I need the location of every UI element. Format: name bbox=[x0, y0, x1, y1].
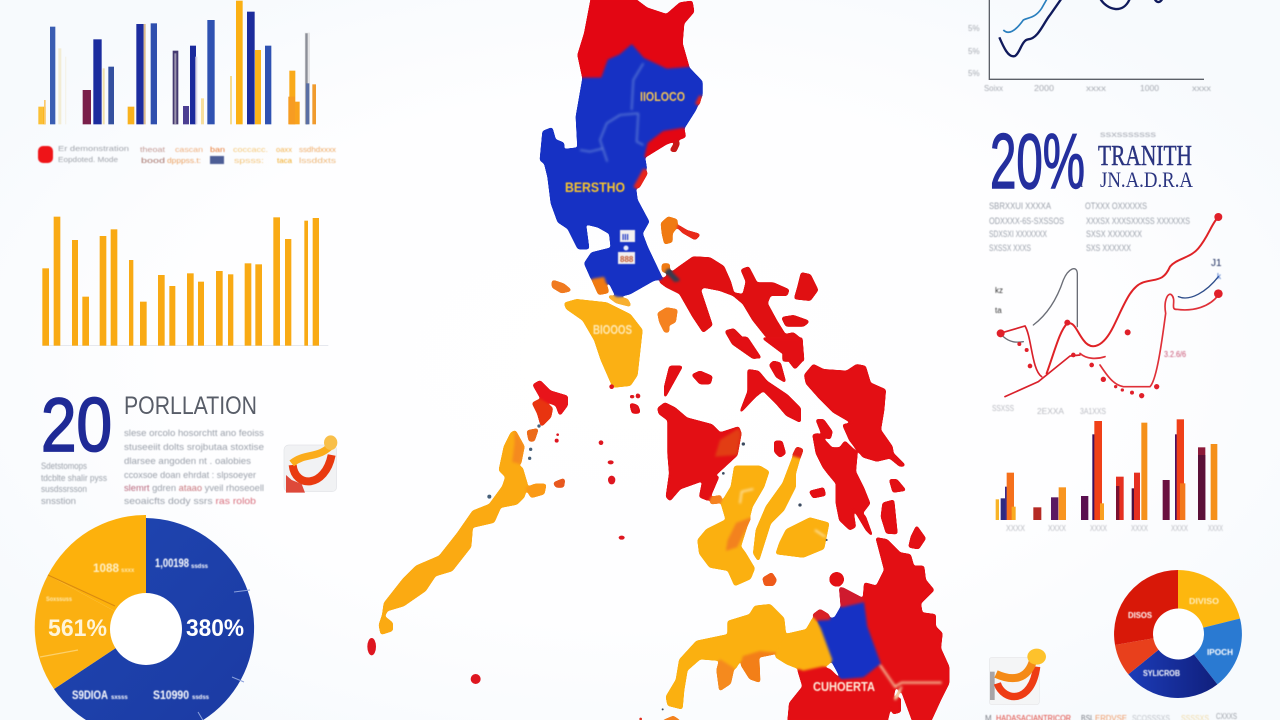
text block: population description: ccoxsoe doan ehrdat : slpsoeyer bbox=[124, 470, 256, 481]
chart axis labels: 1000 bbox=[1140, 84, 1160, 93]
slice: navy bbox=[1128, 634, 1217, 698]
chart labels: kz bbox=[995, 286, 1003, 295]
slice labels: IPOCH bbox=[1207, 648, 1233, 657]
donut labels: 1,00198 bbox=[155, 556, 189, 570]
region: Cebu bbox=[754, 448, 802, 560]
bar chart: yellow bars bbox=[42, 217, 328, 346]
legend labels: ban bbox=[210, 145, 225, 154]
slice labels: DISOS bbox=[1128, 611, 1153, 620]
chart axis labels: xxxx bbox=[1192, 84, 1211, 93]
region: Bicol red bbox=[660, 257, 803, 361]
text block: population description: slese orcolo hosorchtt ano feoiss bbox=[124, 428, 264, 439]
map label: north: IIOLOCO bbox=[640, 89, 685, 104]
text block: right column description: SXSSX XXXS bbox=[989, 243, 1031, 254]
donut labels: S9DIOA bbox=[72, 688, 108, 702]
chart axis labels: 5% bbox=[968, 24, 980, 33]
donut labels bbox=[46, 556, 244, 702]
chart axis labels: 5% bbox=[968, 47, 980, 56]
heading: transit bbox=[1080, 130, 1193, 192]
legend labels: bood bbox=[141, 156, 165, 165]
text block: small left caption: snsstion bbox=[41, 496, 76, 507]
map islets: Palawan bbox=[367, 384, 640, 684]
region: red coastal strips bbox=[645, 128, 685, 157]
line: main red series bbox=[1000, 326, 1080, 397]
bar chart labels: XXXX bbox=[1208, 524, 1223, 533]
bar chart labels: XXXX bbox=[1048, 524, 1067, 533]
slice labels bbox=[1128, 597, 1233, 678]
map label: capital block bbox=[618, 230, 635, 264]
text block: right column description bbox=[989, 201, 1190, 254]
legend labels: Er demonstration bbox=[58, 144, 129, 153]
text block: right column description: SDXSXI XXXXXXX bbox=[989, 229, 1047, 240]
text block: right column description: OTXXX OXXXXXS bbox=[1085, 201, 1147, 212]
legend labels: dpppss.t: bbox=[167, 156, 201, 165]
region: southern Mindanao red bbox=[788, 665, 895, 720]
map label: capital block: 888 bbox=[620, 255, 634, 264]
heading: transit: ssxsssssss bbox=[1100, 130, 1156, 139]
map labels bbox=[565, 89, 876, 694]
text block: population description: seoaicfts dody ssrs ras rolob bbox=[124, 496, 256, 507]
map region: Palawan bbox=[380, 382, 567, 633]
chart labels: 3A1XXS bbox=[1080, 407, 1106, 416]
text block: small left caption: Sdetstomops bbox=[41, 461, 87, 472]
region: Leyte bbox=[813, 434, 872, 535]
chart labels: J1 bbox=[1211, 258, 1222, 269]
data points bbox=[997, 213, 1223, 398]
pie chart: lower right donut bbox=[1114, 570, 1242, 698]
slice: red bbox=[1114, 570, 1178, 645]
chart axes bbox=[989, 0, 1204, 79]
legend labels: theoat bbox=[140, 145, 166, 154]
region: Zamboanga yellow bbox=[667, 605, 785, 708]
chart axis labels: 2000 bbox=[1034, 84, 1055, 93]
text block: right column description: SXS XXXXXX bbox=[1086, 243, 1131, 254]
text block: population description: stuseeiit dolts srojbutaa stoxtise bbox=[124, 442, 264, 453]
line chart: top-right bbox=[968, 0, 1211, 93]
bar chart labels bbox=[1006, 524, 1223, 533]
chart labels: SSXSS bbox=[992, 404, 1014, 413]
donut segment: yellow upper bbox=[48, 515, 146, 628]
bar chart labels: XXXX bbox=[1006, 524, 1026, 533]
chart labels: ta bbox=[995, 306, 1002, 315]
text block: population description bbox=[124, 428, 264, 507]
region: Negros bbox=[698, 467, 768, 585]
text block: small left caption bbox=[41, 461, 107, 507]
legend swatch bbox=[38, 146, 53, 163]
chart axis labels: Soixx bbox=[984, 84, 1003, 93]
donut labels: S10990 bbox=[153, 688, 189, 702]
line chart: red trend bbox=[992, 213, 1223, 416]
chart labels bbox=[992, 258, 1222, 416]
map label: capital block: III bbox=[622, 233, 629, 242]
slice: light blue bbox=[1178, 618, 1242, 684]
region: Samar bbox=[805, 365, 893, 461]
legend labels: oaxx bbox=[276, 145, 292, 154]
legend labels: cascan bbox=[175, 145, 203, 154]
legend labels: ssdhdxxxx bbox=[299, 145, 336, 154]
text block: right column description: SXSX XXXXXXX bbox=[1086, 229, 1143, 240]
legend: top-left chart bbox=[38, 144, 336, 165]
donut hole bbox=[110, 593, 182, 665]
text block: bottom-right footer bbox=[985, 712, 1237, 720]
chart labels: k bbox=[1217, 272, 1222, 281]
text block: population description: slemrt gdren ataao yveil rhoseoell bbox=[124, 483, 264, 494]
region: Bukidnon blue bbox=[818, 602, 880, 678]
donut labels: ssdss bbox=[192, 695, 210, 701]
chart labels: 3.2.6/6 bbox=[1164, 350, 1186, 359]
text block: small left caption: tdcblte shalir pyss bbox=[41, 473, 107, 484]
map region: northern Luzon bbox=[541, 0, 817, 387]
region: central Luzon blue bbox=[541, 45, 702, 297]
slice labels: DIVISO bbox=[1189, 597, 1219, 606]
legend labels: spsss: bbox=[234, 156, 264, 165]
map region: Visayas and Mindanao bbox=[632, 338, 948, 720]
icon: ribbon card right bbox=[989, 649, 1046, 705]
map label: Mindoro: BIOOOS bbox=[593, 322, 632, 337]
donut labels: Soxssuss bbox=[46, 597, 73, 603]
heading: transit: JN.A.D.R.A bbox=[1100, 167, 1193, 192]
legend labels bbox=[58, 144, 336, 165]
slice: yellow bbox=[1178, 570, 1240, 634]
donut labels: 1088 bbox=[93, 561, 119, 575]
bar chart labels: XXXX bbox=[1090, 524, 1108, 533]
chart labels: 2EXXA bbox=[1037, 407, 1065, 416]
bar chart labels: XXXX bbox=[1131, 524, 1149, 533]
text block: right column description: ODXXXX-6S-SXSSOS bbox=[989, 216, 1064, 227]
chart axis labels bbox=[968, 24, 1211, 93]
donut labels: sxxx bbox=[121, 568, 135, 574]
slice: orange red bbox=[1115, 634, 1178, 674]
line: blue series bbox=[1178, 277, 1218, 298]
stat: 20 percent: 20% bbox=[990, 117, 1085, 205]
line: grey series bbox=[1003, 269, 1077, 342]
text block: right column description: XXXSX XXXSXXXSS XXXXXXS bbox=[1086, 216, 1190, 227]
legend labels: lssddxts bbox=[299, 156, 336, 165]
donut hole bbox=[1153, 608, 1204, 660]
legend labels: Eopdoted. Mode bbox=[58, 155, 118, 164]
donut segment: yellow lower bbox=[35, 575, 146, 689]
donut labels: ssdss bbox=[191, 564, 209, 570]
text block: small left caption: susdssrsson bbox=[41, 484, 87, 495]
line: navy series bbox=[999, 0, 1062, 56]
donut segment: blue bbox=[54, 518, 254, 720]
donut labels: 380% bbox=[186, 615, 244, 642]
heading: transit: i bbox=[1080, 176, 1084, 190]
donut labels: sxsss bbox=[111, 695, 128, 701]
slice labels: SYLICROB bbox=[1143, 669, 1180, 678]
stat: big 20: 20 bbox=[41, 383, 112, 468]
chart axis labels: 5% bbox=[968, 69, 980, 78]
region: Ilocos and Cagayan red bbox=[578, 0, 693, 78]
donut labels: 561% bbox=[48, 615, 107, 642]
text block: population description: dlarsee angoden nt . oalobies bbox=[124, 456, 251, 467]
donut chart: population share bbox=[35, 515, 254, 720]
legend labels: coccacc. bbox=[233, 145, 268, 154]
region: Panay bbox=[658, 403, 741, 500]
heading: transit: TRANITH bbox=[1098, 141, 1192, 172]
icon: ribbon card left bbox=[284, 435, 337, 493]
heading: population: PORLLATION bbox=[124, 392, 257, 420]
map: Philippines bbox=[367, 0, 948, 720]
line: blue series bbox=[1003, 0, 1047, 32]
legend labels: taca bbox=[277, 156, 293, 165]
chart axis labels: xxxx bbox=[1086, 84, 1106, 93]
text block: right column description: SBRXXUI XXXXA bbox=[989, 201, 1052, 212]
map islets: Visayas bbox=[620, 394, 828, 720]
bar chart labels: XXXX bbox=[1171, 524, 1189, 533]
bar chart: top-left grouped bars bbox=[38, 1, 316, 124]
map label: central: BERSTHO bbox=[565, 179, 625, 195]
region: eastern Mindanao red bbox=[863, 538, 948, 720]
region: Mindoro yellow bbox=[565, 300, 642, 387]
bar chart: lower right bbox=[996, 419, 1223, 533]
region: Bohol bbox=[777, 518, 828, 557]
map label: south: CUHOERTA bbox=[813, 679, 876, 694]
